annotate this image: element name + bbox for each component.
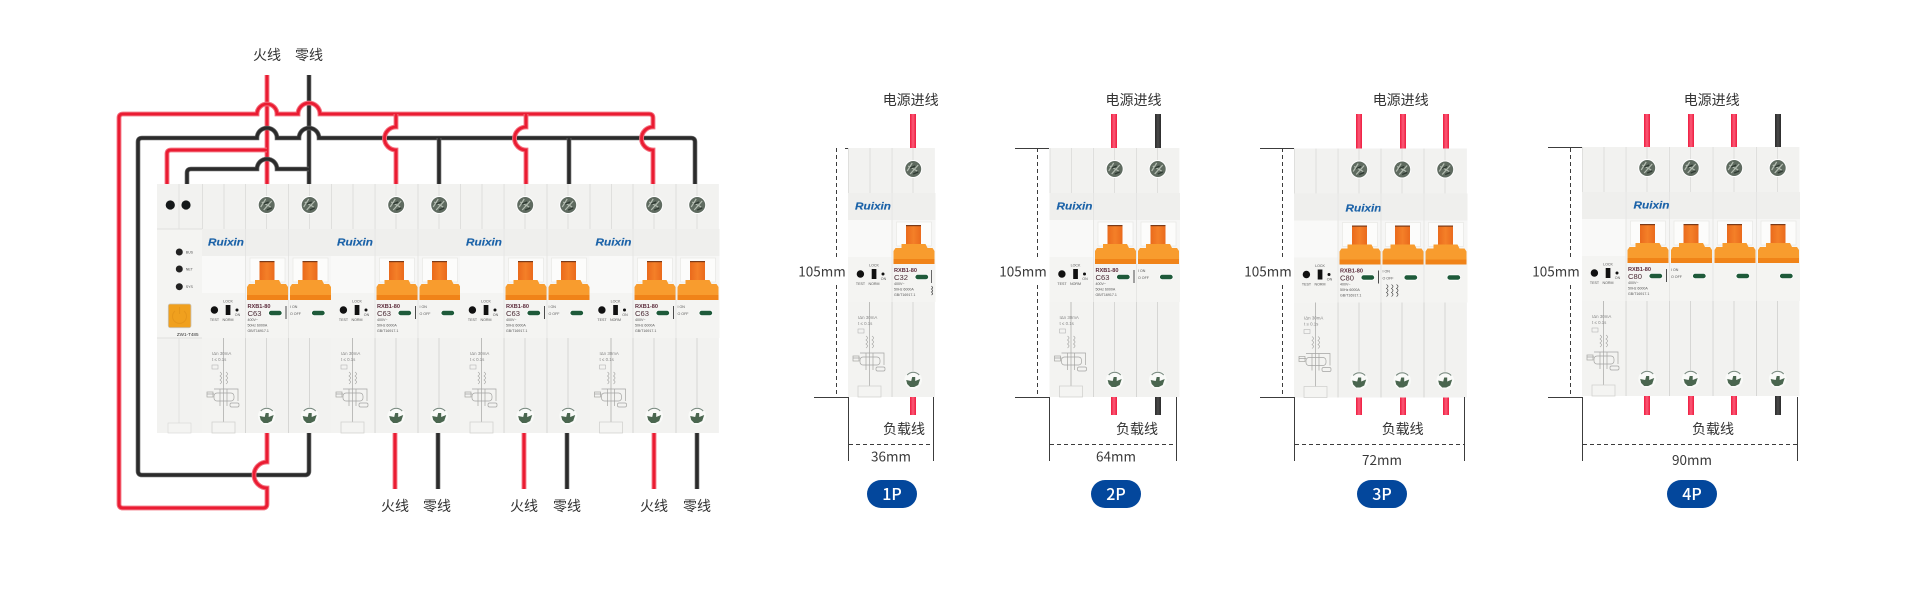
- pole 1: RXB1-80: [1096, 268, 1119, 274]
- leakage module: [1582, 147, 1625, 396]
- leakage module: LOCK: [1071, 264, 1081, 268]
- height dimension: 105mm: [999, 260, 1047, 280]
- height dimension: [1532, 148, 1582, 398]
- pole 2: [1136, 148, 1180, 397]
- bottom labels: live / neutral per group: 火线: [510, 498, 538, 514]
- height dimension: [798, 148, 848, 398]
- pole 1: C80: [1340, 274, 1354, 282]
- pole: 400V~: [894, 282, 904, 286]
- breaker group 4 leakage module: t ≤ 0.1s: [600, 357, 615, 362]
- breaker group 1 leakage module: IΔn 30mA: [212, 351, 231, 356]
- control module ZW1-T485: [157, 184, 202, 433]
- wires: outgoing load lines: [395, 433, 697, 489]
- pole 1: 50Hz 6000A: [1096, 288, 1116, 292]
- width dimension: [1582, 397, 1798, 469]
- breaker group 1 leakage module: NORM: [223, 318, 233, 322]
- leakage module: NORM: [1070, 282, 1081, 286]
- pole 2: [1380, 148, 1424, 398]
- height dimension: 105mm: [1244, 260, 1292, 280]
- bottom labels: live / neutral per group: 零线: [553, 498, 581, 514]
- pole: RXB1-80: [894, 268, 917, 274]
- load line label: 负载线: [883, 421, 925, 437]
- pole 1: 400V~: [1340, 282, 1350, 286]
- leakage module: ON: [881, 277, 887, 281]
- leakage module: TEST: [1590, 281, 1600, 285]
- width dimension: 36mm: [871, 446, 911, 466]
- leakage module: TEST: [1057, 282, 1067, 286]
- leakage module: t ≤ 0.1s: [1592, 320, 1607, 325]
- breaker group 2 leakage module: IΔn 30mA: [341, 351, 360, 356]
- pole 2: O OFF: [1671, 275, 1683, 279]
- badge: 1P: [867, 480, 917, 508]
- breaker group 4 pole L: 400V~: [635, 318, 646, 322]
- label: neutral line in: 零线: [295, 47, 323, 63]
- breaker group 3 pole L: RXB1-80: [506, 304, 529, 310]
- badge: 4P: [1667, 480, 1717, 508]
- leakage module: IΔn 30mA: [858, 315, 877, 320]
- pole 2: O OFF: [1138, 276, 1150, 280]
- leakage module: LOCK: [869, 264, 879, 268]
- wires: live bus loop: [119, 103, 653, 508]
- breaker group 1 pole N: I ON: [290, 305, 298, 309]
- breaker group 4 pole L: RXB1-80: [635, 304, 658, 310]
- pole 1: [1338, 148, 1382, 398]
- leakage module: NORM: [869, 282, 879, 286]
- breaker group 3 pole L: C63: [506, 309, 520, 318]
- breaker group 1 pole L: [245, 184, 289, 433]
- breaker group 3 pole L: 50Hz 6000A: [506, 324, 526, 328]
- pole 1: Ruixin: [1346, 204, 1382, 214]
- breaker group 1 pole N: O OFF: [290, 312, 302, 316]
- control module ZW1-T485: NET: [186, 268, 194, 272]
- breaker group 2 pole N: I ON: [420, 305, 427, 309]
- leakage module: TEST: [856, 282, 866, 286]
- breaker group 2 pole L: 50Hz 6000A: [377, 324, 397, 328]
- breaker group 3 pole N: [546, 184, 590, 433]
- breaker group 1 pole L: GB/T16917.1: [248, 329, 269, 333]
- breaker group 3 pole L: [504, 184, 548, 433]
- breaker group 4 pole L: GB/T16917.1: [635, 329, 656, 333]
- breaker group 3 pole L: 400V~: [506, 318, 516, 322]
- leakage module: NORM: [1603, 281, 1613, 285]
- breaker group 2 leakage module: [331, 184, 374, 433]
- label: power input: 电源进线: [1373, 92, 1429, 108]
- breaker group 1 leakage module: Ruixin: [208, 238, 244, 248]
- width dimension: 72mm: [1362, 449, 1402, 469]
- pole 2: I ON: [1382, 270, 1390, 274]
- breaker group 4 leakage module: TEST: [597, 318, 607, 322]
- leakage module: t ≤ 0.1s: [1060, 321, 1075, 326]
- breaker group 4 pole N: [676, 184, 720, 433]
- pole 1: [1626, 147, 1670, 396]
- pole 1: Ruixin: [1634, 200, 1670, 212]
- pole 1: RXB1-80: [1340, 268, 1363, 274]
- pole 2: I ON: [1138, 269, 1146, 273]
- pole 1: GB/T16917.1: [1096, 293, 1117, 297]
- breaker group 2 pole N: O OFF: [420, 312, 431, 316]
- pole: 50Hz 6000A: [894, 288, 914, 292]
- pole 3: [1712, 147, 1756, 396]
- bottom labels: live / neutral per group: 火线: [381, 498, 409, 514]
- bottom labels: live / neutral per group: 零线: [423, 498, 451, 514]
- width dimension: 64mm: [1096, 446, 1136, 466]
- breaker group 4 pole N: O OFF: [678, 312, 689, 316]
- width dimension: 90mm: [1672, 449, 1712, 469]
- breaker group 4 leakage module: IΔn 30mA: [600, 351, 619, 356]
- leakage module: LOCK: [1315, 264, 1325, 268]
- breaker group 2 leakage module: t ≤ 0.1s: [341, 357, 356, 362]
- badge: 3P: [1357, 480, 1407, 508]
- panel: wiring diagram: [119, 47, 720, 514]
- control module ZW1-T485: BUS: [186, 250, 194, 254]
- pole 1: 50Hz 6000A: [1340, 288, 1360, 292]
- wires: neutral bus loop: [138, 128, 695, 475]
- pole 1: GB/T16917.1: [1628, 292, 1649, 296]
- width dimension: [1050, 397, 1176, 466]
- breaker group 1 leakage module: t ≤ 0.1s: [212, 357, 227, 362]
- breaker group 1 pole L: C63: [248, 309, 261, 318]
- label: power input: 电源进线: [1106, 92, 1162, 108]
- breaker group 3 pole L: GB/T16917.1: [506, 329, 527, 333]
- breaker group 3 leakage module: NORM: [481, 318, 491, 322]
- breaker group 3 pole N: I ON: [548, 305, 556, 309]
- bottom labels: live / neutral per group: [381, 498, 711, 514]
- pole 1: C63: [1096, 273, 1109, 282]
- panel: 1P dimensions: [798, 92, 939, 508]
- breaker group 2 pole L: GB/T16917.1: [377, 329, 398, 333]
- wires: feeds and inner control branches: [167, 75, 309, 184]
- breaker group 3 leakage module: Ruixin: [466, 238, 502, 248]
- breaker group 3 leakage module: t ≤ 0.1s: [470, 357, 485, 362]
- leakage module: IΔn 30mA: [1060, 315, 1079, 320]
- breaker group 1 pole N: [288, 184, 332, 433]
- breaker group 1 leakage module: ON: [235, 313, 241, 317]
- height dimension: 105mm: [1532, 260, 1580, 280]
- breaker group 2 pole L: RXB1-80: [377, 304, 400, 310]
- pole: [892, 148, 936, 397]
- leakage module: Ruixin: [1056, 202, 1092, 212]
- pole 2: [1669, 147, 1713, 396]
- bottom labels: live / neutral per group: 火线: [640, 498, 668, 514]
- panel: 4P dimensions: [1532, 92, 1800, 508]
- badge: 2P: [1091, 480, 1141, 508]
- badge: 4P: 4P: [1682, 481, 1702, 505]
- leakage module: ON: [1082, 277, 1088, 281]
- pole 3: [1424, 148, 1468, 398]
- pole 1: [1093, 148, 1137, 397]
- wires: [910, 114, 916, 415]
- wires: [1644, 114, 1781, 415]
- breaker group 1 leakage module: [202, 184, 245, 433]
- load line label: 负载线: [1116, 421, 1158, 437]
- breaker group 3 pole N: O OFF: [548, 312, 560, 316]
- breaker group 2 leakage module: ON: [364, 313, 370, 317]
- pole: GB/T16917.1: [894, 293, 915, 297]
- wires: [1111, 114, 1161, 415]
- leakage module: ON: [1327, 278, 1333, 282]
- leakage module: [848, 148, 891, 397]
- pole 4: [1756, 147, 1800, 396]
- breaker group 1 pole L: RXB1-80: [248, 304, 271, 310]
- pole 1: 50Hz 6000A: [1628, 286, 1648, 290]
- panel: 3P dimensions: [1244, 92, 1468, 508]
- pole 2: O OFF: [1382, 276, 1394, 280]
- load line label: 负载线: [1692, 421, 1734, 437]
- height dimension: [999, 148, 1049, 398]
- breaker group 2 leakage module: TEST: [339, 318, 349, 322]
- pole 1: RXB1-80: [1628, 267, 1651, 273]
- label: power input: 电源进线: [1684, 92, 1740, 108]
- pole 1: GB/T16917.1: [1340, 294, 1361, 298]
- leakage module: IΔn 30mA: [1304, 316, 1323, 320]
- pole 1: C80: [1628, 272, 1642, 281]
- pole 1: 400V~: [1096, 282, 1106, 286]
- load line label: 负载线: [1382, 421, 1424, 437]
- leakage module: IΔn 30mA: [1592, 314, 1611, 319]
- breaker group 2 pole L: [374, 184, 418, 433]
- badge: 2P: 2P: [1106, 481, 1126, 505]
- breaker group 3 leakage module: TEST: [468, 318, 478, 322]
- breaker group 1 pole L: 50Hz 6000A: [248, 324, 268, 328]
- breaker group 2 leakage module: LOCK: [352, 300, 362, 304]
- wires: [1356, 114, 1449, 415]
- control module ZW1-T485: SYS: [186, 285, 193, 289]
- leakage module: Ruixin: [855, 202, 891, 212]
- breaker group 4 leakage module: LOCK: [611, 300, 621, 304]
- breaker group 2 leakage module: NORM: [352, 318, 362, 322]
- breaker group 2 leakage module: Ruixin: [337, 238, 373, 248]
- breaker group 4 pole N: I ON: [678, 305, 685, 309]
- breaker group 2 pole L: 400V~: [377, 318, 388, 322]
- bottom labels: live / neutral per group: 零线: [683, 498, 711, 514]
- pole 1: 400V~: [1628, 281, 1638, 285]
- breaker group 2 pole L: C63: [377, 309, 391, 318]
- breaker group 1 leakage module: LOCK: [223, 300, 233, 304]
- label: live line in: 火线: [253, 47, 281, 63]
- breaker group 1 pole L: 400V~: [248, 318, 258, 322]
- breaker group 4 leakage module: ON: [622, 313, 628, 317]
- breaker group 4 leakage module: Ruixin: [596, 238, 632, 248]
- breaker group 4 leakage module: NORM: [610, 318, 621, 322]
- breaker group 3 leakage module: IΔn 30mA: [470, 351, 489, 356]
- leakage module: [1294, 148, 1337, 398]
- leakage module: LOCK: [1603, 262, 1613, 266]
- breaker group 3 leakage module: ON: [493, 313, 499, 317]
- pole 2: I ON: [1671, 268, 1679, 272]
- breaker group 4 pole L: 50Hz 6000A: [635, 324, 655, 328]
- leakage module: NORM: [1315, 282, 1325, 286]
- breaker group 4 pole L: C63: [635, 309, 649, 318]
- label: power input: 电源进线: [883, 92, 939, 108]
- leakage module: TEST: [1302, 282, 1312, 286]
- width dimension: [1294, 397, 1464, 469]
- breaker group 4 leakage module: [590, 184, 633, 433]
- breaker group 2 pole N: [418, 184, 462, 433]
- breaker group 1 leakage module: TEST: [210, 318, 220, 322]
- leakage module: t ≤ 0.1s: [858, 321, 873, 326]
- pole: C32: [894, 273, 908, 282]
- leakage module: ON: [1615, 276, 1621, 280]
- panel: 2P dimensions: [999, 92, 1180, 508]
- height dimension: 105mm: [798, 260, 846, 280]
- control module ZW1-T485: ZW1-T485: [177, 332, 199, 337]
- badge: 1P: 1P: [882, 481, 902, 505]
- leakage module: t ≤ 0.1s: [1304, 322, 1319, 326]
- width dimension: [848, 397, 934, 466]
- breaker group 3 leakage module: LOCK: [481, 300, 491, 304]
- badge: 3P: 3P: [1372, 481, 1392, 505]
- breaker group 4 pole L: [632, 184, 676, 433]
- leakage module: [1050, 148, 1093, 397]
- height dimension: [1244, 148, 1294, 398]
- breaker group 3 leakage module: [460, 184, 503, 433]
